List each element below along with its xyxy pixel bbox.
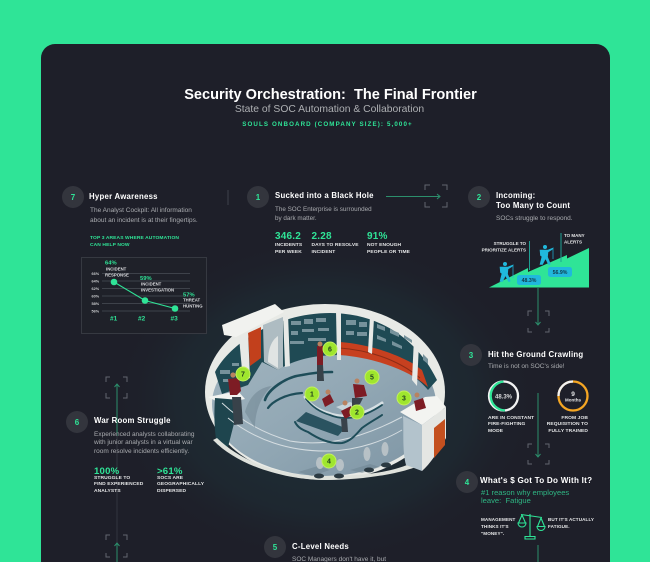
line chart: top 3 areas: THREAT: [183, 298, 200, 302]
floor shadows: [245, 386, 380, 476]
section 1: black hole: 91%: [367, 231, 388, 242]
number badges: [62, 186, 490, 558]
section 6: war room: Experienced analysts collaborating: [94, 430, 194, 438]
donut: 9 months: [558, 382, 588, 410]
background glow: [110, 235, 540, 562]
section 1: black hole: [275, 191, 410, 255]
section 7: hyper awareness: Hyper Awareness: [89, 192, 158, 201]
connector: 7 to 1: [227, 190, 229, 205]
line chart: top 3 areas: RESPONSE: [105, 272, 129, 278]
subtitle: State of SOC Automation & Collaboration: [235, 104, 424, 115]
number badges: 6: [75, 418, 80, 427]
section 6: war room: War Room Struggle: [94, 416, 171, 425]
rim corner block: [222, 304, 284, 337]
mountain chart: alerts: 56.9%: [553, 270, 568, 276]
line chart: top 3 areas: 56%: [92, 310, 100, 314]
section 3: ground crawling: Hit the Ground Crawling: [488, 350, 583, 359]
white pillars: [239, 311, 419, 386]
section 7: hyper awareness: CAN HELP NOW: [90, 243, 130, 248]
line chart: top 3 areas: 60%: [92, 294, 100, 298]
arrow: 1 to 2: [386, 185, 447, 207]
line chart: top 3 areas: 64%: [105, 260, 117, 266]
outer hull: [205, 304, 445, 480]
line chart: top 3 areas: #3: [170, 316, 178, 322]
number badges: 3: [469, 351, 474, 360]
section 4: money: [480, 476, 594, 536]
section 7: hyper awareness: The Analyst Cockpit: All information: [90, 207, 192, 214]
illustration: starship bridge: 7: [241, 372, 245, 378]
number badges: 5: [273, 543, 278, 552]
green location markers: [236, 342, 411, 468]
section 4: money: What's $ Got To Do With It?: [480, 476, 592, 485]
number badges: 2: [477, 193, 482, 202]
section 3: ground crawling: FULLY TRAINED: [548, 429, 588, 434]
illustration: starship bridge: 4: [327, 458, 331, 466]
arrow: 2 to 3: [528, 288, 549, 332]
line chart: top 3 areas: 66%: [92, 272, 100, 276]
donut: 9 months: Months: [565, 398, 581, 402]
line chart: top 3 areas: INCIDENT: [141, 282, 162, 286]
crew figures: [228, 342, 426, 432]
arrow: 3 to 4: [528, 393, 549, 464]
number badges: 1: [256, 193, 261, 202]
section 2: incoming: Incoming:: [496, 191, 536, 200]
section 1: black hole: 2.28: [312, 231, 332, 242]
section 1: black hole: 346.2: [275, 231, 301, 242]
icon: balance scale: [518, 514, 545, 539]
mountain chart: alerts: PRIORITIZE ALERTS: [482, 248, 526, 252]
mountain chart: alerts: TO MANY: [564, 233, 585, 238]
section 7: hyper awareness: [89, 192, 198, 248]
section 1: black hole: NOT ENOUGH: [367, 243, 401, 248]
central consoles: [265, 372, 382, 443]
line chart: top 3 areas: #2: [138, 316, 146, 322]
section 2: incoming: [496, 191, 573, 222]
section 1: black hole: Sucked into a Black Hole: [275, 191, 374, 200]
section 1: black hole: PEOPLE OR TIME: [367, 250, 410, 255]
central desk: [296, 412, 345, 436]
icon: hiker 1: [500, 262, 513, 282]
section 7: hyper awareness: TOP 3 AREAS WHERE AUTOMATION: [90, 236, 179, 241]
line chart: top 3 areas: 62%: [92, 287, 100, 291]
section 6: war room: 100%: [94, 466, 119, 476]
section 2: incoming: Too Many to Count: [496, 200, 570, 210]
section 1: black hole: DAYS TO RESOLVE: [312, 243, 359, 248]
section 6: war room: [94, 416, 204, 494]
section 4: money: MANAGEMENT: [481, 517, 515, 522]
mountain chart: alerts: [482, 233, 589, 288]
floor chairs: [316, 442, 388, 471]
section 3: ground crawling: FROM JOB: [561, 416, 588, 420]
section 4: money: #1 reason why employees: [481, 488, 569, 497]
section 4: money: "MONEY".: [481, 531, 504, 536]
arrow: 5 to 6: [106, 535, 127, 562]
section 1: black hole: The SOC Enterprise is surrounded: [275, 206, 372, 212]
line chart: top 3 areas: #1: [110, 316, 118, 322]
floor: [212, 332, 436, 476]
illustration: starship bridge: [205, 304, 446, 480]
section 3: ground crawling: MODE: [488, 429, 503, 434]
section 2: incoming: SOCs struggle to respond.: [496, 215, 573, 222]
icon: hiker 2: [540, 245, 553, 264]
section 6: war room: >61%: [157, 466, 183, 476]
line chart: top 3 areas: 64%: [92, 280, 100, 284]
section 6: war room: DISPERSED: [157, 489, 186, 494]
number badges: 4: [465, 478, 470, 487]
line chart: top 3 areas: 58%: [92, 302, 100, 306]
donut: 48.3%: [489, 382, 518, 410]
red seating: [340, 342, 428, 387]
section 4: money: FATIGUE.: [548, 524, 570, 529]
donut: 48.3%: 48.3%: [495, 394, 513, 400]
section 6: war room: STRUGGLE TO: [94, 476, 130, 480]
left hull and inner panel: [208, 391, 245, 404]
section 6: war room: GEOGRAPHICALLY: [157, 482, 204, 487]
section 4: money: leave: Fatigue: [481, 496, 531, 505]
title: Security Orchestration: The Final Frontier: [184, 87, 477, 103]
section 1: black hole: PER WEEK: [275, 250, 302, 255]
section 6: war room: SOCS ARE: [157, 476, 183, 480]
front rim shading: [213, 438, 418, 480]
section 1: black hole: INCIDENT: [312, 250, 335, 255]
section 4: money: BUT IT'S ACTUALLY: [548, 517, 594, 522]
back wall: [215, 313, 437, 394]
line chart: top 3 areas: INCIDENT: [106, 266, 127, 272]
section 4: money: THINKS IT'S: [481, 524, 509, 529]
section 6: war room: ANALYSTS: [94, 489, 121, 494]
section 3: ground crawling: ARE IN CONSTANT: [488, 416, 534, 420]
line chart: top 3 areas: 57%: [183, 292, 195, 298]
section 6: war room: FIND EXPERIENCED: [94, 482, 143, 487]
number badges: 7: [71, 193, 76, 202]
section 3: ground crawling: FIRE-FIGHTING: [488, 422, 525, 427]
illustration: starship bridge: 3: [402, 396, 406, 402]
right hull block: [400, 396, 446, 425]
illustration: starship bridge: 1: [310, 392, 314, 398]
mountain chart: alerts: ALERTS: [564, 240, 582, 244]
mountain chart: alerts: 48.3%: [522, 278, 537, 284]
orange door and alcove: [248, 327, 261, 366]
section 3: ground crawling: REQUISITION TO: [547, 422, 588, 427]
illustration: starship bridge: 6: [328, 346, 332, 354]
line chart: top 3 areas: 59%: [140, 276, 152, 282]
section 3: ground crawling: [488, 350, 588, 434]
section 1: black hole: INCIDENTS: [275, 243, 302, 248]
floor rails: [222, 403, 402, 451]
line chart: top 3 areas: [82, 258, 206, 334]
company size line: SOULS ONBOARD (COMPANY SIZE): 5,000+: [242, 121, 413, 128]
section 5: c-level needs: [292, 542, 386, 562]
console panels: [220, 318, 428, 382]
illustration: starship bridge: 2: [355, 410, 359, 416]
arrow: 4 to 5: [537, 545, 539, 562]
line chart: top 3 areas: HUNTING: [183, 304, 203, 308]
section 6: war room: room resolve incidents efficiently.: [94, 448, 189, 454]
section 6: war room: with junior analysts in a virtual war: [94, 439, 193, 446]
section 5: c-level needs: C-Level Needs: [292, 542, 349, 551]
section 7: hyper awareness: about an incident is at their fingertips.: [90, 216, 198, 224]
arrow: 6 to 7: [106, 377, 127, 543]
line chart: top 3 areas: INVESTIGATION: [141, 288, 174, 292]
donut: 9 months: 9: [571, 391, 575, 398]
illustration: starship bridge: 5: [370, 374, 374, 382]
section 3: ground crawling: Time is not on SOC's side!: [488, 363, 564, 370]
mountain chart: alerts: STRUGGLE TO: [494, 241, 526, 246]
section 1: black hole: by dark matter.: [275, 215, 317, 222]
